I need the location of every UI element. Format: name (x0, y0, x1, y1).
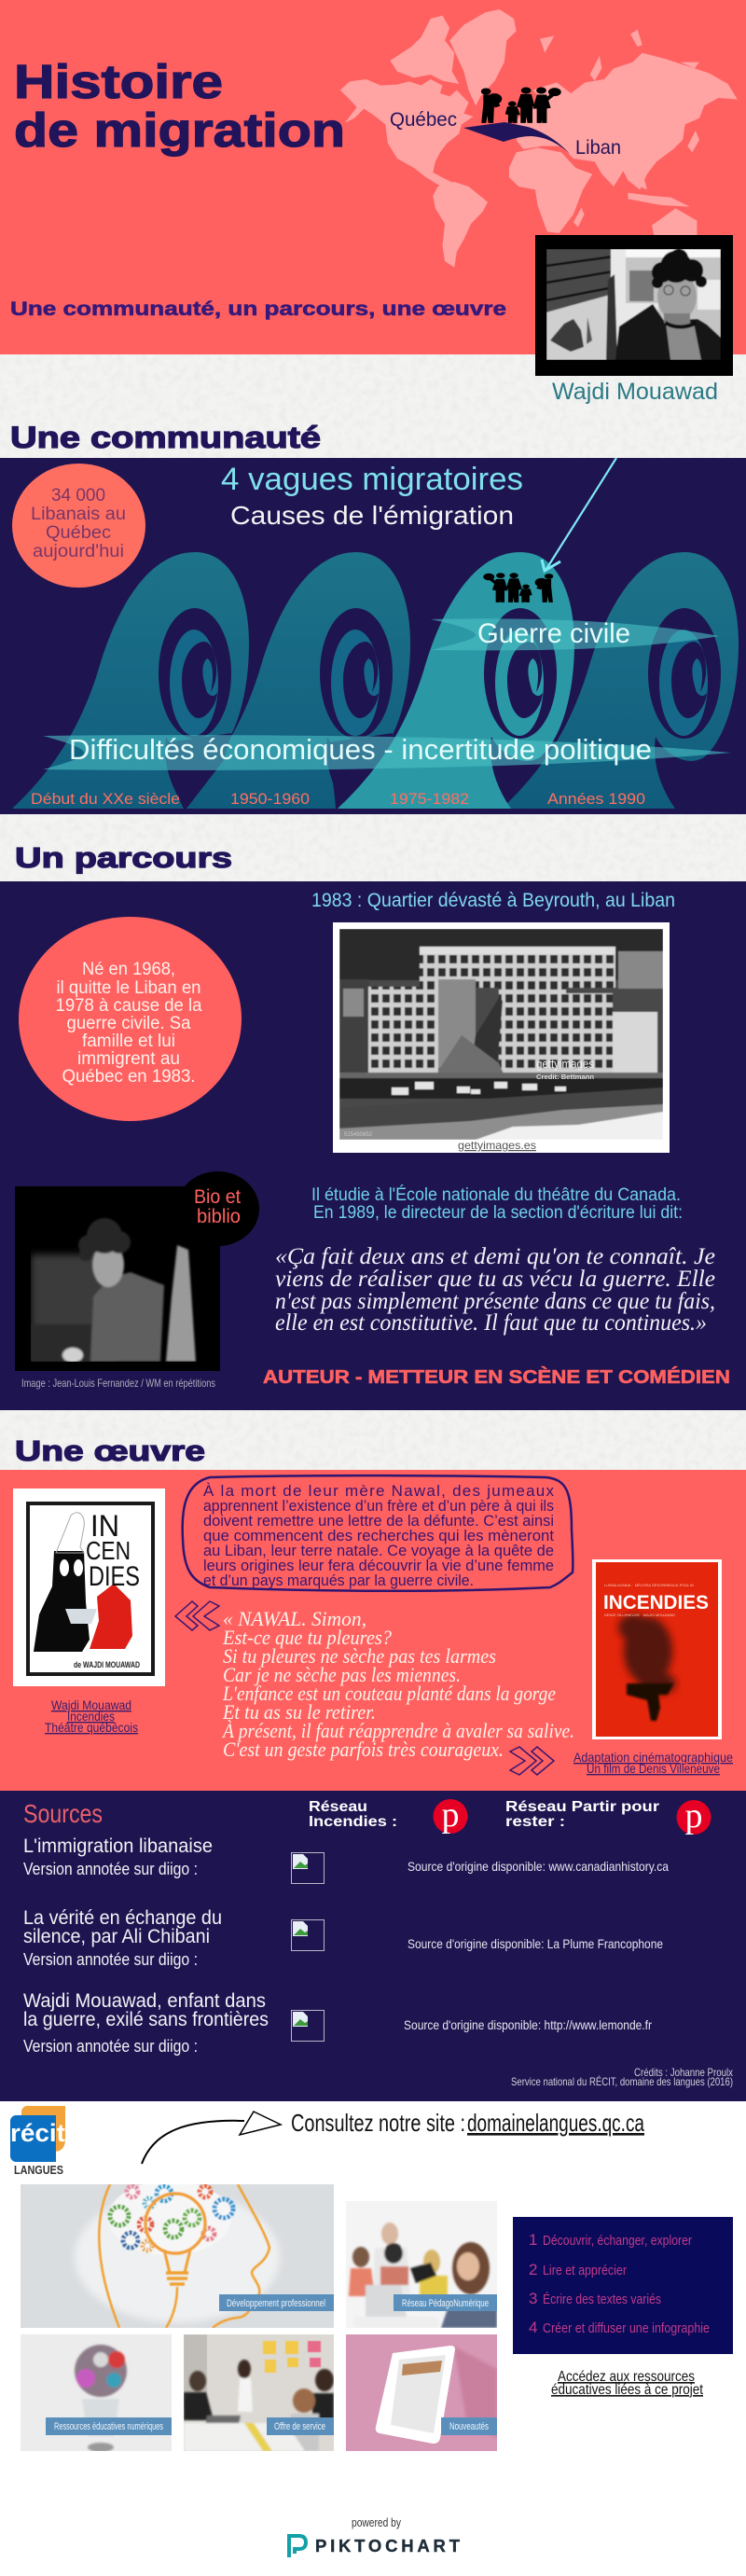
photo: Wajdi Mouawad portrait (535, 235, 733, 376)
tile: ressources éducatives (21, 2334, 172, 2452)
source 3: la guerre, exilé sans frontières (23, 2009, 269, 2030)
panel: learning steps: Lire et apprécier (543, 2263, 627, 2278)
photo: Beyrouth devastated district: gettyimages.es (458, 1139, 536, 1152)
bio bubble: il quitte le Liban en (56, 978, 201, 998)
speech bubble: synopsis: et d’un pays marqués par la guerre civile. (203, 1572, 474, 1589)
quote (275, 1244, 715, 1336)
caption: film (573, 1750, 733, 1776)
link: ressources éducatives: Accédez aux ressources (558, 2369, 695, 2385)
arrow: to website (142, 2112, 281, 2164)
label: réseau Incendies: Incendies : (309, 1814, 397, 1830)
source 1 (23, 1835, 213, 1878)
origin notes (404, 1859, 669, 2032)
poem: Est-ce que tu pleures? (222, 1626, 392, 1649)
source 3: Wajdi Mouawad, enfant dans (23, 1990, 266, 2012)
heading: 4 vagues migratoires: 4 vagues migratoires (221, 462, 523, 497)
source 3 (23, 1990, 269, 2056)
source 2: Version annotée sur diigo : (23, 1950, 198, 1969)
footer: powered by Piktochart: PIKTOCHART (315, 2536, 461, 2555)
caption: film: Adaptation cinématographique (573, 1750, 733, 1765)
poem: Si tu pleures ne sèche pas tes larmes (223, 1644, 496, 1668)
poem (221, 1607, 574, 1761)
photo: Beyrouth devastated district (333, 922, 670, 1153)
icon: Pinterest Partir pour rester (677, 1796, 711, 1835)
panel: learning steps: 4 (529, 2319, 537, 2336)
link: ressources éducatives (551, 2369, 703, 2398)
bio bubble: guerre civile. Sa (67, 1014, 191, 1033)
wave: début du XXe siècle (12, 552, 249, 809)
timeline labels: 1975-1982 (390, 790, 469, 808)
book cover: Incendies: IN (90, 1509, 119, 1543)
speech bubble: synopsis (183, 1475, 573, 1591)
poem: C'est un geste parfois très courageux. (223, 1738, 504, 1761)
arrow: pointing to family (542, 458, 616, 571)
wave: 1950-1960 (173, 552, 410, 809)
photo: Beyrouth devastated district: gettyimages (536, 1057, 594, 1071)
link 2: broken image icon (291, 1919, 325, 1951)
panel: header (0, 0, 746, 354)
label: Québec: Québec (390, 109, 457, 131)
heading: Une œuvre: Une œuvre (15, 1434, 205, 1467)
bio bubble: 1978 à cause de la (56, 996, 202, 1016)
panel: learning steps (513, 2217, 733, 2354)
panel: sources (0, 1791, 746, 2101)
heading: Un parcours: Un parcours (15, 841, 232, 874)
film poster: Incendies: INCENDIES (603, 1592, 709, 1613)
speech bubble: synopsis: au Liban, leur terre natale. Ce voyage à la quête de (203, 1542, 554, 1559)
poem: L'enfance est un couteau planté dans la gorge (222, 1682, 556, 1705)
icon: migrant family (482, 88, 560, 122)
tile: offre de service (184, 2334, 334, 2451)
quote: «Ça fait deux ans et demi qu'on te connaît. Je (275, 1244, 715, 1269)
source 2: La vérité en échange du (23, 1907, 222, 1929)
text: études (311, 1185, 683, 1223)
text: études: En 1989, le directeur de la section d'écriture lui dit: (313, 1203, 683, 1223)
speech bubble: synopsis: apprennent l’existence d’un frère et d’un père à qui ils (203, 1497, 554, 1515)
film poster: Incendies: DENIS VILLENEUVE · WAJDI MOUAWAD (604, 1613, 675, 1617)
photo: Beyrouth devastated district: Credit: Bettmann (536, 1074, 594, 1081)
text: site link: domainelangues.qc.ca (467, 2109, 644, 2137)
book cover: Incendies: DIES (89, 1561, 140, 1592)
tagline: auteur: AUTEUR - METTEUR EN SCÈNE ET COMÉDIEN (263, 1366, 730, 1388)
panel: learning steps: 1 (529, 2231, 537, 2249)
bio bubble: immigrent au (77, 1049, 180, 1069)
quote: elle en est constitutive. Il faut que tu continues.» (275, 1310, 707, 1336)
label: Liban: Liban (575, 137, 621, 159)
caption: book: Incendies (67, 1709, 115, 1724)
panel: learning steps: Créer et diffuser une infographie (543, 2320, 710, 2336)
photo: Beyrouth devastated district: 515450852 (344, 1132, 373, 1138)
source 3: Version annotée sur diigo : (23, 2037, 198, 2056)
panel: un parcours (0, 881, 746, 1410)
caption: book: Wajdi Mouawad (51, 1697, 131, 1712)
panel: une communauté (0, 458, 746, 814)
chart: four migration waves (12, 552, 739, 809)
label: difficultés: Difficultés économiques - incertitude politique (69, 733, 652, 766)
badge: bio et biblio: biblio (197, 1206, 241, 1227)
tile: nouveautés (346, 2334, 497, 2451)
title: Histoire (14, 55, 223, 108)
stat bubble: 34 000 Libanais: Libanais au (31, 505, 126, 524)
world map (340, 9, 738, 268)
panel: learning steps: 2 (529, 2261, 537, 2278)
caption: Beyrouth 1983: 1983 : Quartier dévasté à Beyrouth, au Liban (311, 890, 675, 911)
caption: film: Un film de Denis Villeneuve (587, 1761, 720, 1776)
credits (511, 2066, 733, 2088)
panel: une œuvre (0, 1470, 746, 1791)
subtitle: Une communauté, un parcours, une œuvre (10, 298, 506, 320)
text: études: Il étudie à l'École nationale du théâtre du Canada. (311, 1185, 681, 1205)
timeline labels: Début du XXe siècle (31, 790, 180, 808)
heading: Une communauté: Une communauté (10, 421, 321, 454)
icon: opening quotes (175, 1601, 219, 1630)
icon: closing quotes (510, 1747, 554, 1775)
subheading: causes: Causes de l'émigration (230, 501, 514, 530)
title: de migration (14, 104, 345, 157)
bio bubble: famille et lui (82, 1032, 175, 1051)
link 3: broken image icon (291, 2011, 325, 2041)
label: réseau Partir pour rester: Réseau Partir pour (505, 1799, 659, 1815)
label: réseau Incendies: Réseau (309, 1799, 367, 1815)
bio bubble: Né en 1968, (82, 960, 175, 979)
stat bubble: 34 000 Libanais: 34 000 (51, 486, 105, 506)
source 2 (23, 1907, 222, 1969)
caption: book (45, 1697, 138, 1735)
timeline labels (31, 790, 645, 808)
bio bubble (19, 917, 242, 1121)
icon: Pinterest Incendies: p (442, 1795, 459, 1835)
caption: book: Théâtre québécois (45, 1720, 138, 1735)
badge: bio et biblio (176, 1171, 259, 1246)
source 1: Version annotée sur diigo : (23, 1860, 198, 1878)
label: réseau Partir pour rester (505, 1799, 659, 1830)
stat bubble: 34 000 Libanais (12, 464, 145, 588)
logo: RÉCIT Langues: LANGUES (14, 2163, 63, 2177)
icon: Pinterest Partir pour rester: p (684, 1796, 703, 1835)
book cover: Incendies: CEN (86, 1536, 131, 1565)
footer: powered by Piktochart (289, 2515, 461, 2557)
gap between waves one and two (168, 733, 231, 809)
photo: Mouawad in rehearsal (15, 1186, 220, 1371)
speech bubble: synopsis: que commencent des recherches qui les mèneront (203, 1527, 554, 1544)
tile: réseau pédagonumérique (346, 2201, 497, 2328)
link 1: broken image icon (291, 1852, 325, 1884)
icon: family on wave (484, 574, 553, 602)
timeline labels: Années 1990 (547, 790, 645, 808)
band: guerre civile (431, 618, 719, 650)
poem: À présent, il faut réapprendre à avaler sa salive. (221, 1719, 574, 1742)
source 2: silence, par Ali Chibani (23, 1926, 210, 1947)
book cover: Incendies (13, 1489, 165, 1686)
speech bubble: synopsis: À la mort de leur mère Nawal, des jumeaux (203, 1482, 554, 1500)
label: guerre civile: Guerre civile (477, 618, 630, 649)
caption: image credit: Image : Jean-Louis Fernandez / WM en répétitions (21, 1377, 215, 1390)
label: réseau Partir pour rester: rester : (505, 1814, 565, 1830)
stat bubble: 34 000 Libanais: aujourd'hui (33, 542, 124, 561)
film poster: Incendies: LUBNA AZABAL · MÉLISSA DÉSORMEAUX-POULIN (604, 1583, 694, 1587)
text: site link (291, 2109, 644, 2137)
poem: Car je ne sèche pas les miennes. (223, 1663, 461, 1686)
badge: bio et biblio: Bio et (194, 1186, 241, 1208)
icon: Pinterest Incendies (433, 1795, 468, 1835)
timeline labels: 1950-1960 (230, 790, 310, 808)
film poster: Incendies (592, 1559, 722, 1739)
speech bubble: synopsis: leurs origines leur fera découvrir la vie d’une femme (203, 1557, 554, 1574)
origin notes: Source d'origine disponible: La Plume Francophone (408, 1936, 663, 1951)
book cover: Incendies: de WAJDI MOUAWAD (74, 1660, 140, 1669)
logo: RÉCIT Langues (10, 2106, 65, 2177)
tile: développement professionnel (21, 2181, 334, 2328)
speech bubble: synopsis: doivent remettre une lettre de la défunte. C’est ainsi (203, 1512, 554, 1530)
text: site link: Consultez notre site : (291, 2109, 465, 2137)
poem: « NAWAL. Simon, (223, 1607, 366, 1630)
wave: 1975-1982 (338, 552, 574, 809)
band: difficultés économiques (43, 735, 731, 770)
logo: RÉCIT Langues: récit (10, 2119, 65, 2147)
gap between waves two and three (329, 733, 393, 809)
panel: learning steps: Découvrir, échanger, explorer (543, 2233, 692, 2249)
poem: Et tu as su le retirer. (222, 1700, 376, 1724)
quote: viens de réaliser que tu as vécu la guerre. Elle (275, 1267, 715, 1292)
caption: Wajdi Mouawad: Wajdi Mouawad (552, 379, 718, 405)
source 1: L'immigration libanaise (23, 1835, 213, 1857)
label: réseau Incendies (309, 1799, 397, 1830)
heading: sources: Sources (23, 1799, 103, 1828)
title (14, 55, 345, 157)
wave: années 1990 (502, 552, 739, 809)
arrow: Liban to Québec (463, 122, 570, 154)
stat bubble: 34 000 Libanais: Québec (46, 523, 111, 543)
link: ressources éducatives: éducatives liées à ce projet (551, 2382, 703, 2398)
bio bubble: Québec en 1983. (62, 1067, 196, 1087)
panel: learning steps: Écrire des textes variés (543, 2292, 661, 2307)
origin notes: Source d'origine disponible: http://www.lemonde.fr (404, 2017, 652, 2032)
panel: learning steps: 3 (529, 2290, 537, 2307)
origin notes: Source d'origine disponible: www.canadianhistory.ca (408, 1859, 669, 1874)
footer: powered by Piktochart: powered by (352, 2515, 401, 2529)
quote: n'est pas simplement présente dans ce que tu fais, (275, 1289, 715, 1314)
